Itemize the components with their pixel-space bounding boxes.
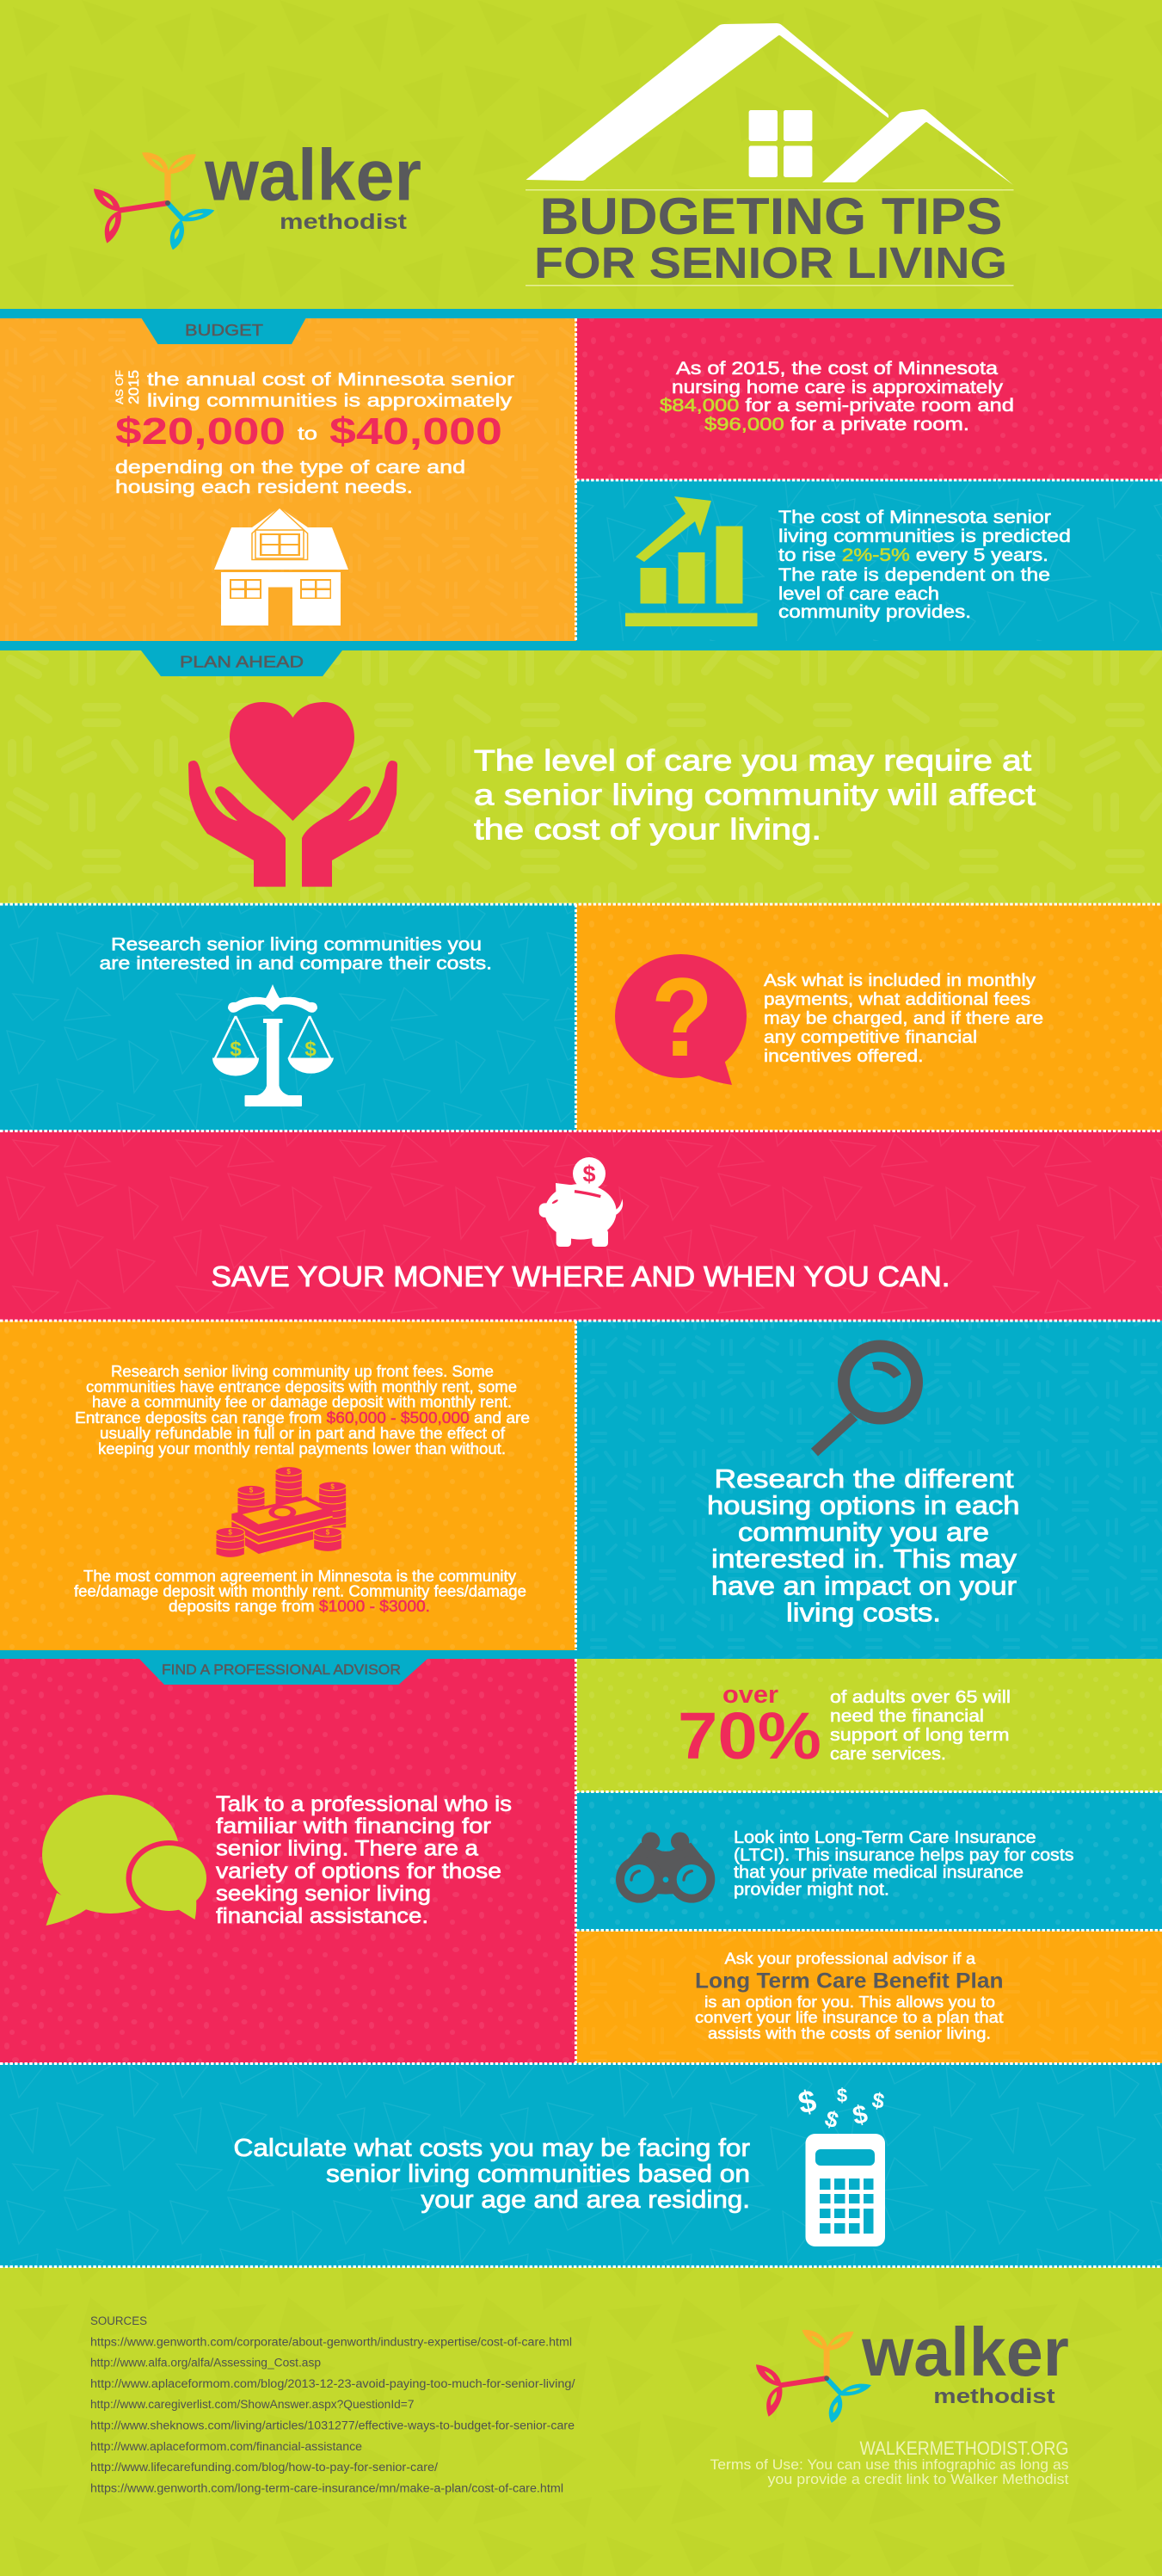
icon: footer sprout [756, 2330, 871, 2423]
panel: housing options [576, 1321, 1162, 1659]
text: benefit plan: convert your life insurance to a plan that [695, 2008, 1003, 2026]
panel: footer [0, 2267, 1162, 2576]
logo: walker methodist: methodist [280, 210, 408, 234]
panel: nursing home cost [576, 318, 1162, 480]
text: housing options: community you are [738, 1517, 989, 1547]
panel: save money [0, 1131, 1162, 1321]
icon: question bubble [615, 954, 747, 1085]
icon: dollar signs: $ [851, 2100, 870, 2130]
text: predicted rise: The rate is dependent on the [778, 564, 1050, 585]
text: sources: https://www.genworth.com/corporate/about-genworth/industry-expertise/cost-of-care.html [90, 2335, 572, 2349]
text: calculate costs: Calculate what costs you may be facing for [234, 2135, 751, 2162]
icon: three leaf sprout [94, 152, 214, 250]
text: talk to a professional: variety of options for those [216, 1859, 501, 1883]
logo: walker methodist [94, 135, 421, 250]
title [526, 188, 1013, 287]
text: sources: http://www.alfa.org/alfa/Assessing_Cost.asp [90, 2356, 321, 2370]
text: common agreement: The most common agreement in Minnesota is the community [83, 1567, 517, 1585]
text: calculate costs: senior living communities based on [326, 2160, 750, 2188]
text: predicted rise [778, 507, 1071, 622]
text: adults over 65: care services. [830, 1745, 946, 1764]
text: ask monthly payments: incentives offered. [764, 1047, 924, 1066]
text: research communities [100, 934, 492, 974]
text: long term care insurance: provider might not. [734, 1881, 889, 1900]
stat: over 70%: 70% [678, 1699, 821, 1773]
text: benefit plan [695, 1950, 1003, 2043]
icon: question bubble: ? [651, 954, 713, 1080]
logo: footer walker methodist: walker [861, 2313, 1069, 2390]
text: annual cost: depending on the type of care and [115, 457, 465, 478]
panel: ask monthly payments [576, 903, 1162, 1131]
text: level of care: a senior living community will affect [474, 780, 1036, 812]
text: nursing home care [660, 358, 1014, 434]
tab: plan ahead: PLAN AHEAD [180, 654, 304, 671]
text: website and terms [710, 2437, 1069, 2487]
text: predicted rise: living communities is predicted [778, 526, 1071, 546]
icon: calculator [805, 2134, 885, 2246]
text: common agreement: deposits range from $1000 - $3000. [169, 1597, 430, 1615]
text: sources: https://www.genworth.com/long-term-care-insurance/mn/make-a-plan/cost-of-care.html [90, 2481, 563, 2495]
text: housing options: interested in. This may [711, 1544, 1018, 1574]
icon: money stacks [216, 1467, 347, 1557]
text: up front fees: have a community fee or damage deposit with monthly rent. [92, 1392, 512, 1411]
text: website and terms: you provide a credit link to Walker Methodist [767, 2471, 1069, 2487]
icon: balance scale with dollars: $ [304, 1038, 317, 1061]
band: teal divider [0, 641, 1162, 650]
icon: dollar signs: $ [870, 2088, 886, 2114]
text: calculate costs: your age and area residing. [421, 2186, 750, 2214]
text: annual cost: $20,000 [115, 410, 286, 453]
text: sources: http://www.lifecarefunding.com/blog/how-to-pay-for-senior-care/ [90, 2461, 438, 2474]
text: long term care insurance: that your private medical insurance [734, 1864, 1024, 1883]
text: housing options: Research the different [714, 1464, 1014, 1494]
text: research communities: Research senior living communities you [111, 934, 482, 955]
title: FOR SENIOR LIVING [534, 238, 1007, 287]
text: talk to a professional: Talk to a professional who is [216, 1792, 512, 1816]
text: annual cost: the annual cost of Minnesota senior [147, 369, 514, 390]
text: talk to a professional: seeking senior living [216, 1882, 431, 1906]
text: housing options: housing options in each [707, 1490, 1020, 1520]
tab: budget: BUDGET [185, 322, 263, 339]
icon: magnifying glass [815, 1346, 917, 1452]
text: up front fees: Entrance deposits can range from $60,000 - $500,000 and are [75, 1408, 530, 1427]
text: ask monthly payments: Ask what is included in monthly [764, 971, 1036, 990]
icon: money stacks: $ [326, 1529, 330, 1537]
icon: money stacks: $ [330, 1482, 335, 1490]
text: nursing home care: nursing home care is approximately [672, 377, 1003, 397]
panel: up front fees [0, 1321, 576, 1650]
panel: seventy percent [576, 1659, 1162, 1792]
icon: house [214, 508, 348, 626]
tab: find a professional advisor: FIND A PROFESSIONAL ADVISOR [162, 1661, 401, 1678]
heading: save your money: SAVE YOUR MONEY WHERE AND WHEN YOU CAN. [212, 1260, 950, 1292]
icon: piggy bank and coin: $ [582, 1162, 596, 1187]
text: annual cost: AS OF [114, 370, 126, 404]
icon: balance scale with dollars: $ [230, 1038, 242, 1061]
icon: dollar signs: $ [795, 2082, 820, 2121]
text: predicted rise: The cost of Minnesota senior [778, 507, 1051, 527]
icon: rising bar chart [625, 496, 757, 626]
text: website and terms: WALKERMETHODIST.ORG [860, 2437, 1068, 2459]
text: sources: http://www.sheknows.com/living/articles/1031277/effective-ways-to-budget-for-senior-care [90, 2419, 575, 2431]
text: ask monthly payments: any competitive financial [764, 1028, 977, 1047]
tab: find a professional advisor [139, 1659, 427, 1685]
text: ask monthly payments [764, 971, 1043, 1066]
icon: balance scale with dollars [212, 984, 334, 1106]
text: adults over 65 [830, 1688, 1011, 1764]
text: annual cost: to [298, 424, 317, 444]
icon: dollar signs: $ [837, 2085, 847, 2106]
text: housing options [707, 1464, 1020, 1628]
text: benefit plan: Long Term Care Benefit Plan [695, 1969, 1003, 1993]
text: sources [90, 2314, 575, 2495]
text: website and terms: Terms of Use: You can use this infographic as long as [710, 2456, 1068, 2473]
text: adults over 65: support of long term [830, 1726, 1010, 1745]
icon: dollar signs [795, 2082, 886, 2134]
icon: binoculars [616, 1832, 715, 1903]
text: benefit plan: is an option for you. This allows you to [704, 1993, 995, 2011]
text: housing options: living costs. [786, 1597, 941, 1628]
text: nursing home care: $84,000 for a semi-private room and [660, 395, 1014, 416]
text: long term care insurance [734, 1828, 1073, 1900]
text: ask monthly payments: payments, what additional fees [764, 990, 1030, 1009]
text: talk to a professional: familiar with financing for [216, 1814, 491, 1838]
text: long term care insurance: (LTCI). This insurance helps pay for costs [734, 1846, 1073, 1865]
text: sources: http://www.caregiverlist.com/ShowAnswer.aspx?QuestionId=7 [90, 2398, 415, 2411]
text: level of care [474, 745, 1036, 847]
logo: footer walker methodist [756, 2313, 1069, 2423]
icon: heart in hands [188, 702, 397, 887]
text: research communities: are interested in and compare their costs. [100, 953, 492, 974]
text: up front fees: keeping your monthly rental payments lower than without. [98, 1439, 506, 1457]
panel: budget [0, 318, 576, 641]
text: talk to a professional [216, 1792, 512, 1928]
text: annual cost: $40,000 [329, 410, 502, 453]
logo: walker methodist: walker [204, 135, 421, 216]
text: level of care: the cost of your living. [474, 814, 821, 847]
icon: money stacks: $ [249, 1487, 254, 1494]
panel: research communities [0, 903, 576, 1131]
panel: header background [0, 0, 1162, 310]
icon: money stacks: $ [286, 1468, 291, 1476]
text: up front fees: usually refundable in full or in part and have the effect of [100, 1424, 506, 1442]
panel: calculate costs [0, 2063, 1162, 2267]
title: BUDGETING TIPS [540, 188, 1003, 245]
text: talk to a professional: senior living. There are a [216, 1836, 478, 1860]
icon: money stacks: $ [228, 1529, 232, 1537]
panel: cost rise [576, 480, 1162, 641]
icon: dollar signs: $ [821, 2105, 842, 2134]
text: sources: http://www.aplaceformom.com/blog/2013-12-23-avoid-paying-too-much-for-senior-living/ [90, 2377, 575, 2390]
text: adults over 65: need the financial [830, 1707, 984, 1726]
band: teal divider [0, 309, 1162, 318]
text: predicted rise: to rise 2%-5% every 5 years. [778, 545, 1048, 565]
text: long term care insurance: Look into Long-Term Care Insurance [734, 1828, 1036, 1847]
text: common agreement: fee/damage deposit with monthly rent. Community fees/damage [74, 1581, 526, 1600]
tab: budget [141, 317, 306, 344]
tab: plan ahead [141, 650, 342, 676]
text: predicted rise: level of care each [778, 583, 939, 604]
text: level of care: The level of care you may require at [474, 745, 1032, 778]
text: up front fees: Research senior living community up front fees. Some [111, 1362, 494, 1380]
text: ask monthly payments: may be charged, and if there are [764, 1009, 1043, 1028]
text: predicted rise: community provides. [778, 601, 971, 622]
text: benefit plan: assists with the costs of senior living. [708, 2024, 991, 2043]
text: adults over 65: of adults over 65 will [830, 1688, 1011, 1707]
panel: plan ahead [0, 650, 1162, 903]
text: annual cost: housing each resident needs. [115, 477, 413, 497]
text: up front fees [75, 1362, 530, 1457]
text: sources: SOURCES [90, 2314, 147, 2327]
band: teal divider [0, 1650, 576, 1659]
text: benefit plan: Ask your professional advisor if a [724, 1950, 976, 1967]
text: annual cost: living communities is approximately [147, 391, 512, 411]
logo: footer walker methodist: methodist [933, 2385, 1055, 2408]
panel: long term care insurance [576, 1792, 1162, 1931]
text: calculate costs [234, 2135, 751, 2214]
text: up front fees: communities have entrance deposits with monthly rent, some [86, 1377, 517, 1396]
icon: house roofs [526, 23, 1013, 185]
text: sources: http://www.aplaceformom.com/financial-assistance [90, 2440, 362, 2453]
text: talk to a professional: financial assistance. [216, 1904, 428, 1928]
icon: speech bubbles [42, 1795, 212, 1926]
icon: piggy bank and coin [539, 1157, 623, 1247]
text: annual cost: 2015 [126, 370, 142, 404]
stat: over 70%: over [722, 1681, 778, 1709]
text: annual cost [114, 369, 514, 497]
text: common agreement [74, 1567, 526, 1615]
panel: find a professional advisor [0, 1659, 576, 2063]
text: nursing home care: As of 2015, the cost of Minnesota [676, 358, 998, 379]
text: housing options: have an impact on your [711, 1571, 1017, 1600]
panel: benefit plan [576, 1931, 1162, 2063]
text: nursing home care: $96,000 for a private room. [704, 414, 969, 434]
